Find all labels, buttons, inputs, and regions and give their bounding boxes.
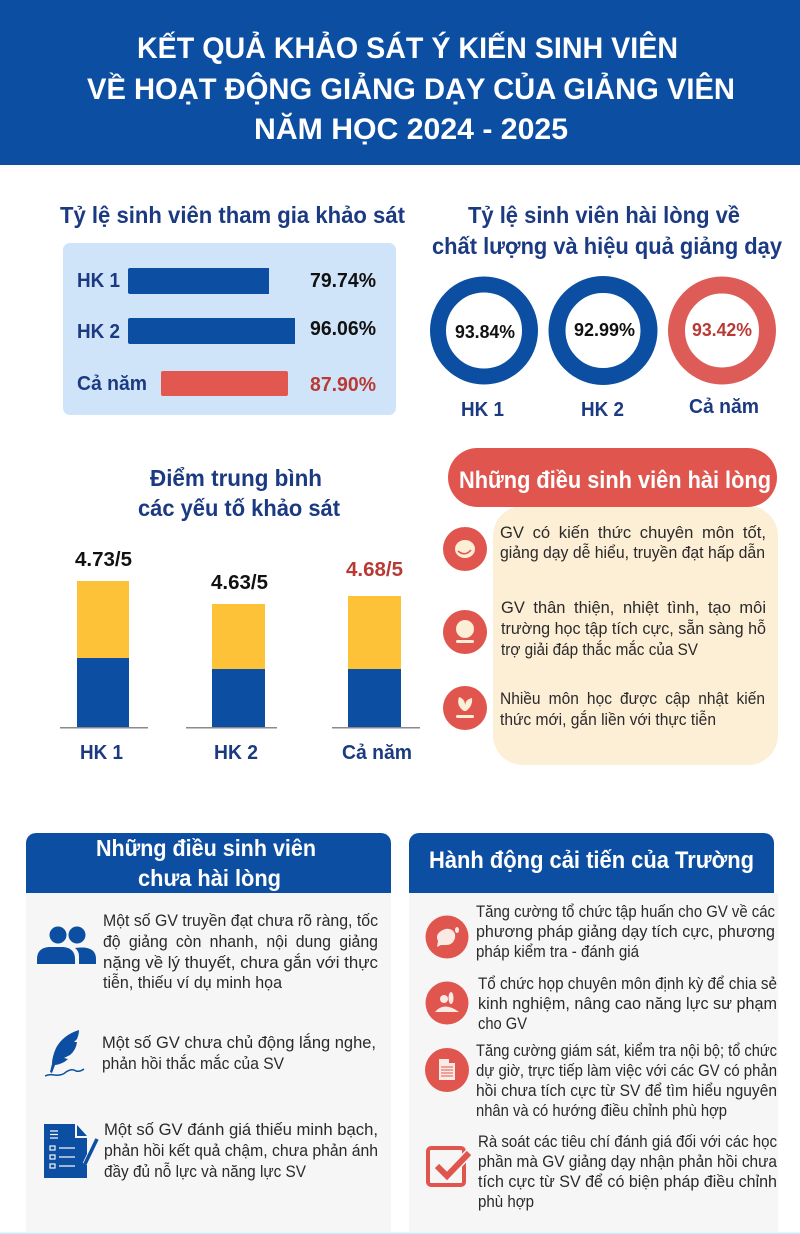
donut chart: full year: Cả năm: [689, 396, 759, 418]
text: meetings: Tổ chức họp chuyên môn định kỳ để chia sẻ: [478, 975, 777, 993]
text: teaching clarity: Một số GV truyền đạt chưa rõ ràng, tốc: [103, 912, 378, 930]
panel: improvement actions: [409, 833, 778, 1232]
heading: improvement actions: [409, 833, 774, 893]
text: training: [476, 903, 775, 961]
heading: satisfaction rate: [432, 202, 782, 259]
stacked bar chart: average score: [60, 549, 420, 764]
text: criteria review: phần mà GV giảng dạy nhận phản hồi chưa: [478, 1153, 778, 1171]
icon: people: [37, 926, 96, 964]
text: training: Tăng cường tổ chức tập huấn cho GV về các: [476, 903, 775, 921]
donut chart: HK 1: [438, 284, 530, 421]
panel: participation bar chart: [63, 243, 396, 415]
text: knowledge: GV có kiến thức chuyên môn tốt,: [500, 524, 766, 542]
text: assessment: Một số GV đánh giá thiếu minh bạch,: [104, 1121, 378, 1139]
donut chart: HK 1: HK 1: [461, 399, 504, 421]
icon: head: [443, 527, 487, 571]
title banner: VỀ HOẠT ĐỘNG GIẢNG DẠY CỦA GIẢNG VIÊN: [87, 72, 735, 106]
stacked bar chart: average score: HK 1: [80, 742, 123, 764]
heading: average score: các yếu tố khảo sát: [138, 495, 340, 521]
text: meetings: cho GV: [478, 1015, 527, 1033]
icon: checklist document: [44, 1124, 97, 1178]
text: monitoring: [476, 1042, 777, 1120]
heading pill: satisfied: Những điều sinh viên hài lòng: [459, 467, 771, 494]
text: assessment: phản hồi kết quả chậm, chưa phản ánh: [104, 1142, 378, 1160]
text: criteria review: [478, 1133, 778, 1211]
text: listening: [102, 1033, 376, 1073]
text: knowledge: giảng dạy dễ hiểu, truyền đạt hấp dẫn: [500, 543, 765, 562]
donut chart: HK 2: [557, 284, 649, 421]
panel: participation bar chart: HK 1: [77, 270, 120, 292]
heading: unsatisfied: Những điều sinh viên: [96, 835, 316, 861]
text: knowledge: [500, 524, 766, 562]
text: monitoring: hồi chưa tích cực từ SV để tìm hiểu nguyên: [476, 1082, 777, 1100]
text: friendly: trường học tập tích cực, sẵn sàng hỗ: [501, 619, 766, 638]
text: friendly: GV thân thiện, nhiệt tình, tạo môi: [501, 599, 766, 617]
text: teaching clarity: độ giảng còn nhanh, nội dung giảng: [103, 933, 378, 951]
heading: unsatisfied: chưa hài lòng: [138, 865, 281, 891]
donut chart: full year: 93.42%: [692, 319, 752, 340]
heading: satisfaction rate: Tỷ lệ sinh viên hài lòng về: [468, 202, 740, 228]
panel: unsatisfied points: [26, 833, 391, 1232]
heading: satisfaction rate: chất lượng và hiệu quả giảng dạy: [432, 233, 782, 259]
text: teaching clarity: [103, 912, 378, 992]
stacked bar chart: average score: 4.63/5: [211, 572, 268, 594]
title banner: KẾT QUẢ KHẢO SÁT Ý KIẾN SINH VIÊN: [137, 31, 678, 65]
panel: participation bar chart: 79.74%: [310, 270, 376, 292]
text: training: phương pháp giảng dạy tích cực, phương: [476, 923, 775, 941]
title banner: NĂM HỌC 2024 - 2025: [254, 112, 568, 146]
panel: participation bar chart: Cả năm: [77, 373, 147, 395]
icon: checkbox: [428, 1148, 469, 1185]
text: meetings: [478, 975, 777, 1033]
donut chart: HK 2: 92.99%: [574, 319, 635, 340]
icon: speech bubble: [426, 916, 468, 958]
text: training: pháp kiểm tra - đánh giá: [476, 943, 640, 961]
donut chart: full year: [676, 285, 768, 418]
text: teaching clarity: tiễn, thiếu ví dụ minh họa: [103, 973, 283, 992]
text: friendly: [501, 599, 766, 659]
text: criteria review: Rà soát các tiêu chí đánh giá đối với các học: [478, 1133, 777, 1151]
text: updated courses: thức mới, gắn liền với thực tiễn: [500, 710, 716, 729]
text: listening: Một số GV chưa chủ động lắng nghe,: [102, 1033, 376, 1052]
stacked bar chart: average score: 4.68/5: [346, 559, 403, 581]
heading pill: satisfied: [448, 448, 777, 507]
heading: unsatisfied: [26, 833, 391, 893]
text: teaching clarity: nặng về lý thuyết, chưa gắn với thực: [103, 953, 378, 972]
heading: improvement actions: Hành động cải tiến của Trường: [429, 847, 754, 874]
text: assessment: [104, 1121, 378, 1181]
panel: satisfied points: [443, 448, 778, 765]
text: criteria review: tích cực từ SV để có biện pháp điều chỉnh: [478, 1173, 777, 1191]
text: updated courses: [500, 690, 765, 729]
title banner: [0, 0, 800, 165]
icon: meeting: [426, 982, 468, 1024]
icon: person: [443, 610, 487, 654]
text: monitoring: dự giờ, trực tiếp làm việc với các GV có phản: [476, 1062, 777, 1080]
stacked bar chart: average score: 4.73/5: [75, 549, 132, 571]
heading: average score: [138, 465, 340, 521]
icon: document: [425, 1048, 469, 1092]
heading: average score: Điểm trung bình: [150, 465, 322, 491]
text: monitoring: nhân và có hướng điều chỉnh phù hợp: [476, 1102, 727, 1120]
donut chart: HK 2: HK 2: [581, 399, 624, 421]
icon: quill: [45, 1030, 84, 1076]
panel: participation bar chart: 96.06%: [310, 318, 376, 340]
text: assessment: đầy đủ nỗ lực và năng lực SV: [104, 1162, 306, 1181]
text: updated courses: Nhiều môn học được cập nhật kiến: [500, 690, 765, 708]
text: friendly: trợ giải đáp thắc mắc của SV: [501, 640, 698, 659]
panel: participation bar chart: 87.90%: [310, 374, 376, 396]
stacked bar chart: average score: HK 2: [214, 742, 258, 764]
heading: participation rate: Tỷ lệ sinh viên tham gia khảo sát: [60, 202, 405, 228]
text: criteria review: phù hợp: [478, 1193, 534, 1211]
text: listening: phản hồi thắc mắc của SV: [102, 1054, 284, 1073]
icon: leaf: [443, 686, 487, 730]
panel: participation bar chart: HK 2: [77, 321, 120, 343]
donut chart: HK 1: 93.84%: [455, 321, 515, 342]
stacked bar chart: average score: Cả năm: [342, 742, 412, 764]
text: meetings: kinh nghiệm, nâng cao năng lực sư phạm: [478, 995, 777, 1013]
